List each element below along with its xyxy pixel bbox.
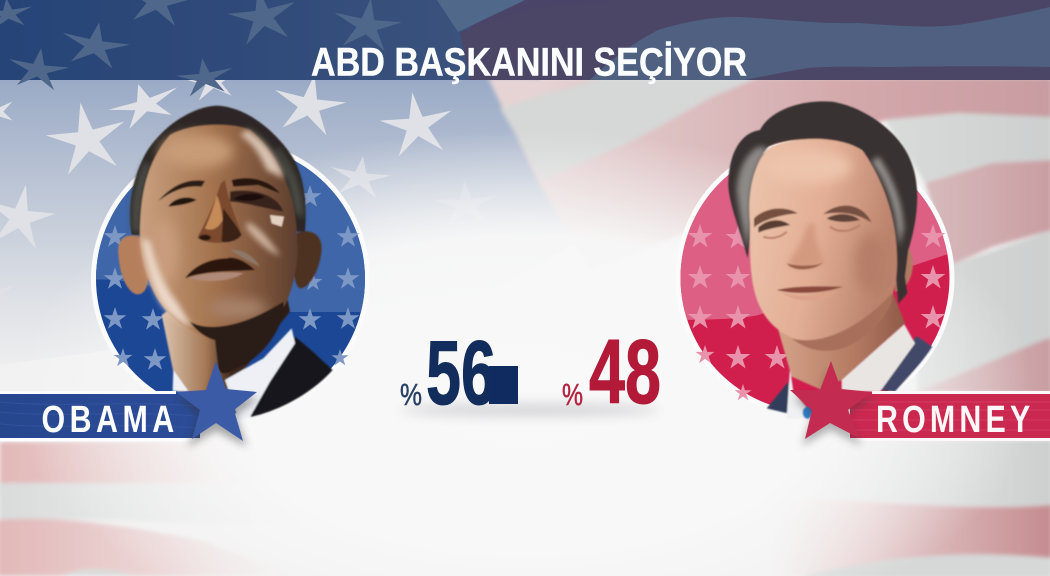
badge circle: blue [91,152,366,414]
title: ABD BAŞKANINI SEÇİYOR [311,40,747,84]
percent sign red: % [562,377,583,412]
numbers shadow [400,404,660,416]
percent sign blue: % [400,377,422,412]
number 48: 48 [589,322,661,423]
badge circle: red [675,130,960,418]
number 56: 56 [426,323,496,424]
icon: red star [790,361,874,446]
photo: Obama [118,106,333,420]
result: Romney 48 percent [562,322,661,423]
name banner: Romney [850,391,1050,441]
blue square [489,366,518,404]
icon: blue star [176,361,259,447]
label: ROMNEY: ROMNEY [876,399,1034,441]
name banner: Obama [0,391,200,442]
title banner [0,0,1050,98]
result: Obama 56 percent [400,323,518,424]
panel: Obama portrait [90,106,375,420]
photo: Romney [728,101,932,419]
label: OBAMA: OBAMA [42,399,179,441]
panel: Romney portrait [675,101,960,419]
